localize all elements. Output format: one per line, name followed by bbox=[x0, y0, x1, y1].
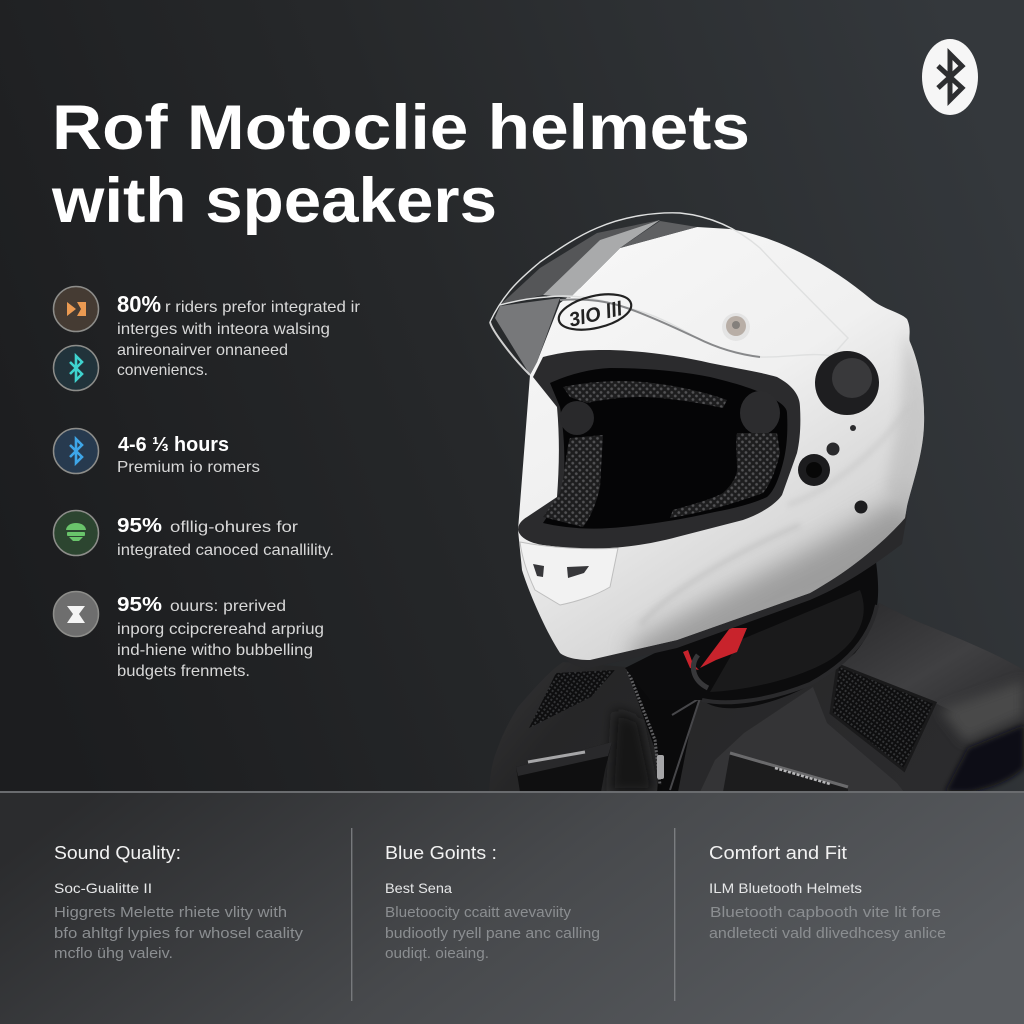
zipper bbox=[627, 668, 664, 785]
shell bbox=[518, 227, 924, 660]
stat: 95 percent integrated: 95% bbox=[117, 515, 162, 537]
column: comfort and fit bbox=[709, 843, 946, 942]
visor dark band bbox=[500, 220, 660, 305]
chin vent panel bbox=[520, 542, 618, 605]
visor outline bbox=[490, 213, 848, 357]
stat: 95 percent integrated: integrated canoced canallility. bbox=[117, 542, 334, 559]
jaw crease bbox=[640, 525, 800, 625]
column: comfort and fit: andletecti vald dlivedhcesy anlice bbox=[709, 925, 946, 942]
icon: teal bluetooth bbox=[54, 346, 98, 390]
icon: green helmet bbox=[54, 510, 98, 556]
stat: 95 percent budgets bbox=[117, 594, 324, 680]
front seam bbox=[670, 698, 700, 790]
back shadow bbox=[886, 340, 924, 498]
visor front gray bbox=[495, 298, 560, 375]
column: blue points: oudiqt. oieaing. bbox=[385, 945, 489, 962]
column: sound quality: Higgrets Melette rhiete vlity with bbox=[54, 904, 287, 921]
lower rim band bbox=[558, 510, 907, 668]
stat: 95 percent budgets: 95% bbox=[117, 594, 162, 616]
column: comfort and fit: ILM Bluetooth Helmets bbox=[709, 880, 862, 896]
visor front edge bbox=[490, 322, 530, 375]
sleeve shadow bbox=[945, 725, 1024, 792]
stat: 95 percent integrated: ofllig-ohures for bbox=[170, 519, 299, 536]
pocket left bbox=[516, 742, 612, 792]
mesh panel right bbox=[831, 665, 935, 770]
speaker pad right bbox=[740, 391, 780, 435]
stat: 95 percent budgets: ind-hiene witho bubbelling bbox=[117, 642, 313, 659]
column: sound quality bbox=[54, 843, 304, 962]
stat: 80 percent: anireonairver onnaneed bbox=[117, 342, 288, 359]
bottom panel bbox=[0, 791, 1024, 1024]
stat: 80 percent: 80% bbox=[117, 291, 161, 317]
neck collar rim bbox=[702, 605, 877, 702]
title bbox=[51, 93, 750, 236]
column: sound quality: mcflo ühg valeiv. bbox=[54, 945, 173, 962]
visor screw bbox=[722, 313, 750, 341]
visor light band bbox=[543, 220, 660, 298]
shoulder panel bbox=[842, 610, 1024, 707]
icon: bluetooth badge bbox=[922, 39, 978, 115]
logo badge bbox=[555, 288, 635, 336]
stat: 80 percent: r riders prefor integrated ir bbox=[165, 299, 361, 316]
stat: 80 percent bbox=[117, 291, 361, 379]
title: Rof Motoclie helmets bbox=[52, 93, 750, 163]
vent left bbox=[533, 564, 544, 577]
column: blue points: Best Sena bbox=[385, 880, 452, 896]
stats list bbox=[54, 286, 361, 680]
button small bbox=[826, 442, 840, 456]
eyeport rim bbox=[518, 350, 800, 549]
shell shading bbox=[622, 340, 924, 652]
stat: 95 percent budgets: ouurs: prerived bbox=[170, 598, 286, 615]
stat: hours bbox=[117, 434, 260, 476]
column: sound quality: bfo ahltgf lypies for whosel caality bbox=[54, 925, 304, 942]
jacket body bbox=[878, 604, 1024, 724]
buckle bbox=[693, 655, 708, 688]
jaw shadow bbox=[622, 494, 908, 652]
inner neck shadow bbox=[625, 555, 878, 708]
stat: hours: Premium io romers bbox=[117, 459, 260, 476]
helmet bbox=[490, 213, 935, 685]
red strap bbox=[683, 628, 747, 670]
side crease bbox=[792, 428, 892, 504]
sleeve highlight bbox=[940, 680, 1024, 742]
column: comfort and fit: Bluetooth capbooth vite lit fore bbox=[710, 904, 941, 921]
visor upper strip bbox=[620, 221, 697, 248]
pocket right bbox=[723, 753, 848, 792]
button socket bbox=[798, 454, 830, 486]
vent right bbox=[567, 566, 589, 578]
icon: orange media bbox=[54, 286, 98, 332]
logo badge: 3lO lll bbox=[567, 298, 625, 332]
column: blue points: Blue Goints : bbox=[385, 843, 497, 863]
speaker pad left bbox=[560, 401, 594, 435]
title: with speakers bbox=[51, 166, 497, 236]
stat: 95 percent integrated bbox=[117, 515, 334, 559]
button small top bbox=[850, 425, 856, 431]
stat: 95 percent budgets: inporg ccipcrereahd arpriug bbox=[117, 621, 324, 638]
cheek pad left bbox=[543, 435, 603, 527]
neck soft collar bbox=[710, 590, 864, 692]
visor lip line bbox=[560, 299, 760, 357]
stat: 80 percent: interges with inteora walsing bbox=[117, 321, 330, 338]
brow liner bbox=[563, 381, 727, 408]
speaker knob bbox=[815, 351, 879, 415]
mesh panel left bbox=[529, 670, 615, 728]
visor bbox=[490, 213, 848, 375]
column: sound quality: Soc-Gualitte II bbox=[54, 880, 152, 896]
left chest shadow bbox=[610, 710, 655, 792]
rider with jacket bbox=[489, 555, 1024, 792]
column: sound quality: Sound Quality: bbox=[54, 843, 181, 863]
icon: grey cross bbox=[54, 592, 98, 636]
column: blue points: Bluetoocity ccaitt avevaviity bbox=[385, 904, 572, 921]
stat: hours: 4-6 ⅓ hours bbox=[118, 434, 229, 456]
column: comfort and fit: Comfort and Fit bbox=[709, 843, 847, 863]
right chest panel bbox=[700, 687, 904, 792]
rear button bbox=[854, 500, 868, 514]
chest shadow bbox=[626, 668, 702, 792]
stat: 80 percent: conveniencs. bbox=[117, 362, 208, 379]
column: blue points: budiootly ryell pane anc calling bbox=[385, 925, 600, 942]
column: blue points bbox=[385, 843, 600, 962]
icon: blue bluetooth bbox=[54, 428, 98, 474]
stat: 95 percent budgets: budgets frenmets. bbox=[117, 663, 250, 680]
cheek pad right bbox=[670, 433, 780, 518]
eyeport interior bbox=[543, 368, 787, 529]
